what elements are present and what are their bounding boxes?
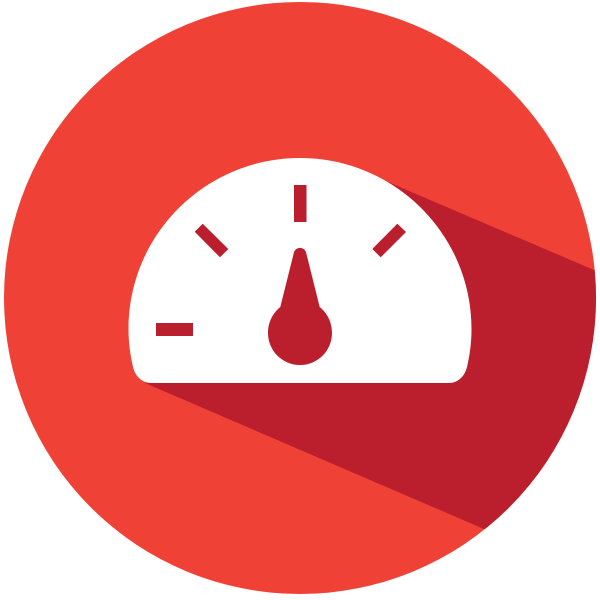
tick mark: left bbox=[156, 323, 193, 336]
gauge dial face bbox=[128, 158, 472, 383]
icon: speedometer gauge bbox=[128, 158, 472, 383]
tick mark: upper left bbox=[195, 224, 228, 257]
tick mark: top bbox=[294, 185, 306, 222]
gauge needle bbox=[268, 248, 332, 365]
tick mark: upper right bbox=[372, 224, 406, 257]
long diagonal shadow bbox=[145, 176, 600, 529]
